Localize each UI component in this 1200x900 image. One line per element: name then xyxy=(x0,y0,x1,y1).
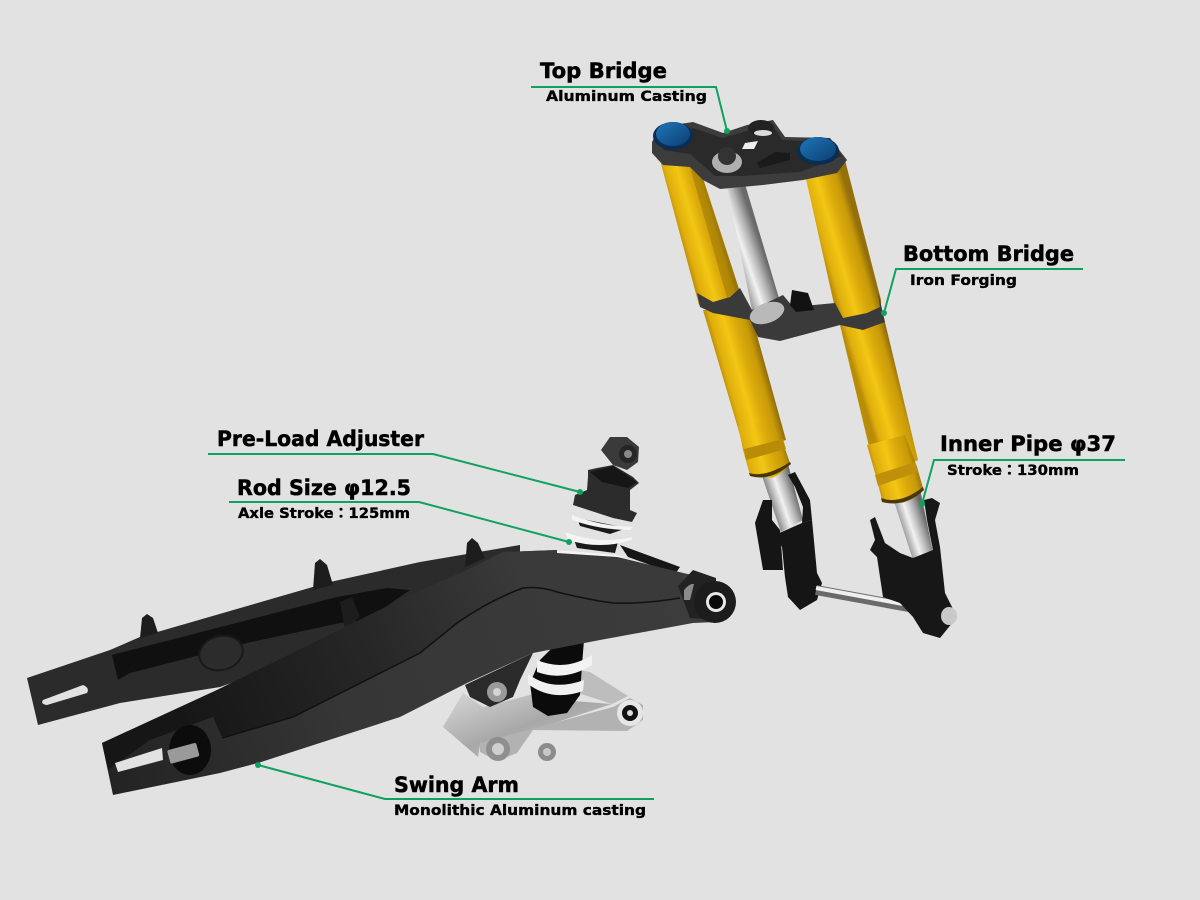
right fork collar xyxy=(867,435,924,504)
lower pivot bolt xyxy=(465,653,533,707)
label: top bridge xyxy=(531,59,730,134)
label: rod size xyxy=(229,476,572,545)
label: pre-load adjuster xyxy=(208,427,583,495)
left fork leg bracket xyxy=(755,472,822,610)
label: swing arm xyxy=(255,762,654,819)
near side swing arm xyxy=(102,550,716,795)
left tube shadow strip xyxy=(690,167,738,298)
label: inner pipe: Stroke：130mm xyxy=(947,463,1079,479)
far arm inner channel xyxy=(112,588,410,680)
label: rod size: Axle Stroke：125mm xyxy=(238,506,410,522)
label: bottom bridge xyxy=(881,242,1083,316)
top cap left xyxy=(653,122,693,150)
label: top bridge: Aluminum Casting xyxy=(546,89,707,105)
near arm slot xyxy=(115,748,163,772)
right lower fork tube xyxy=(840,318,918,480)
near arm upper facet xyxy=(102,550,683,770)
axle adjuster xyxy=(167,725,211,775)
pivot bushing xyxy=(678,570,736,623)
label: pre-load adjuster: Pre-Load Adjuster xyxy=(217,427,425,451)
label: swing arm: Swing Arm xyxy=(394,773,519,797)
lower shock and linkage xyxy=(443,640,643,761)
label: swing arm: Monolithic Aluminum casting xyxy=(394,803,646,819)
left lower chrome tube xyxy=(760,464,803,532)
label: top bridge: Top Bridge xyxy=(540,59,667,83)
rear suspension assembly xyxy=(27,437,736,795)
far arm slot xyxy=(42,685,88,705)
body crease xyxy=(222,588,680,738)
label: bottom bridge: Iron Forging xyxy=(910,273,1017,289)
top cap right xyxy=(797,137,839,165)
upper shock and preload adjuster xyxy=(557,437,639,558)
top bridge xyxy=(652,120,847,189)
front fork assembly xyxy=(652,120,957,638)
right upper fork tube xyxy=(804,160,881,322)
label: inner pipe xyxy=(919,432,1125,507)
steering stem xyxy=(727,184,781,315)
far side swing arm xyxy=(27,545,520,725)
left upper fork tube xyxy=(660,160,740,305)
far arm cover plate xyxy=(195,631,247,675)
label: inner pipe: Inner Pipe φ37 xyxy=(940,432,1116,456)
chain stay xyxy=(620,545,680,574)
left lower fork tube xyxy=(703,310,786,452)
front axle xyxy=(816,588,914,608)
label: bottom bridge: Bottom Bridge xyxy=(903,242,1074,266)
mounting tabs xyxy=(140,538,485,638)
axle nut xyxy=(941,607,957,625)
right lower chrome tube xyxy=(892,489,933,560)
left fork collar xyxy=(738,420,791,478)
right fork leg bracket xyxy=(870,498,957,638)
bottom bridge xyxy=(697,288,885,341)
label: rod size: Rod Size φ12.5 xyxy=(237,476,411,500)
